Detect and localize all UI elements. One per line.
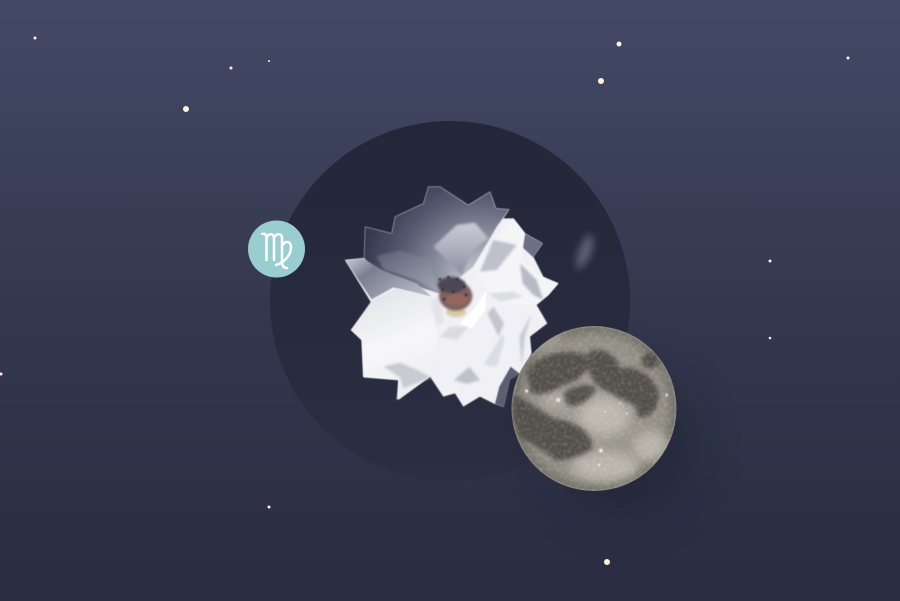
right upper petals: [473, 218, 558, 305]
flower: [345, 187, 558, 407]
crescent reflection: [577, 233, 593, 270]
icon: virgo badge: [248, 220, 305, 278]
moon shadow: [550, 370, 694, 514]
flower silhouette: [345, 187, 558, 407]
dark circle backdrop: [270, 121, 630, 481]
moon maria: [513, 350, 659, 460]
upper middle petal: [433, 223, 488, 275]
upper left petal: [377, 251, 439, 293]
moon highlands: [525, 331, 670, 482]
bright inner petal: [460, 290, 487, 328]
dark petal under moon: [495, 367, 520, 407]
back petals, in shadow: [364, 187, 509, 293]
left band petal: [345, 259, 432, 299]
petal shadows: [383, 240, 543, 388]
moon surface mottling: [510, 325, 678, 493]
flower centre: [438, 276, 472, 317]
far right shaded petal: [522, 233, 543, 257]
lower left white petal: [351, 288, 438, 400]
moon craters: [525, 389, 668, 466]
moon: [510, 325, 678, 493]
